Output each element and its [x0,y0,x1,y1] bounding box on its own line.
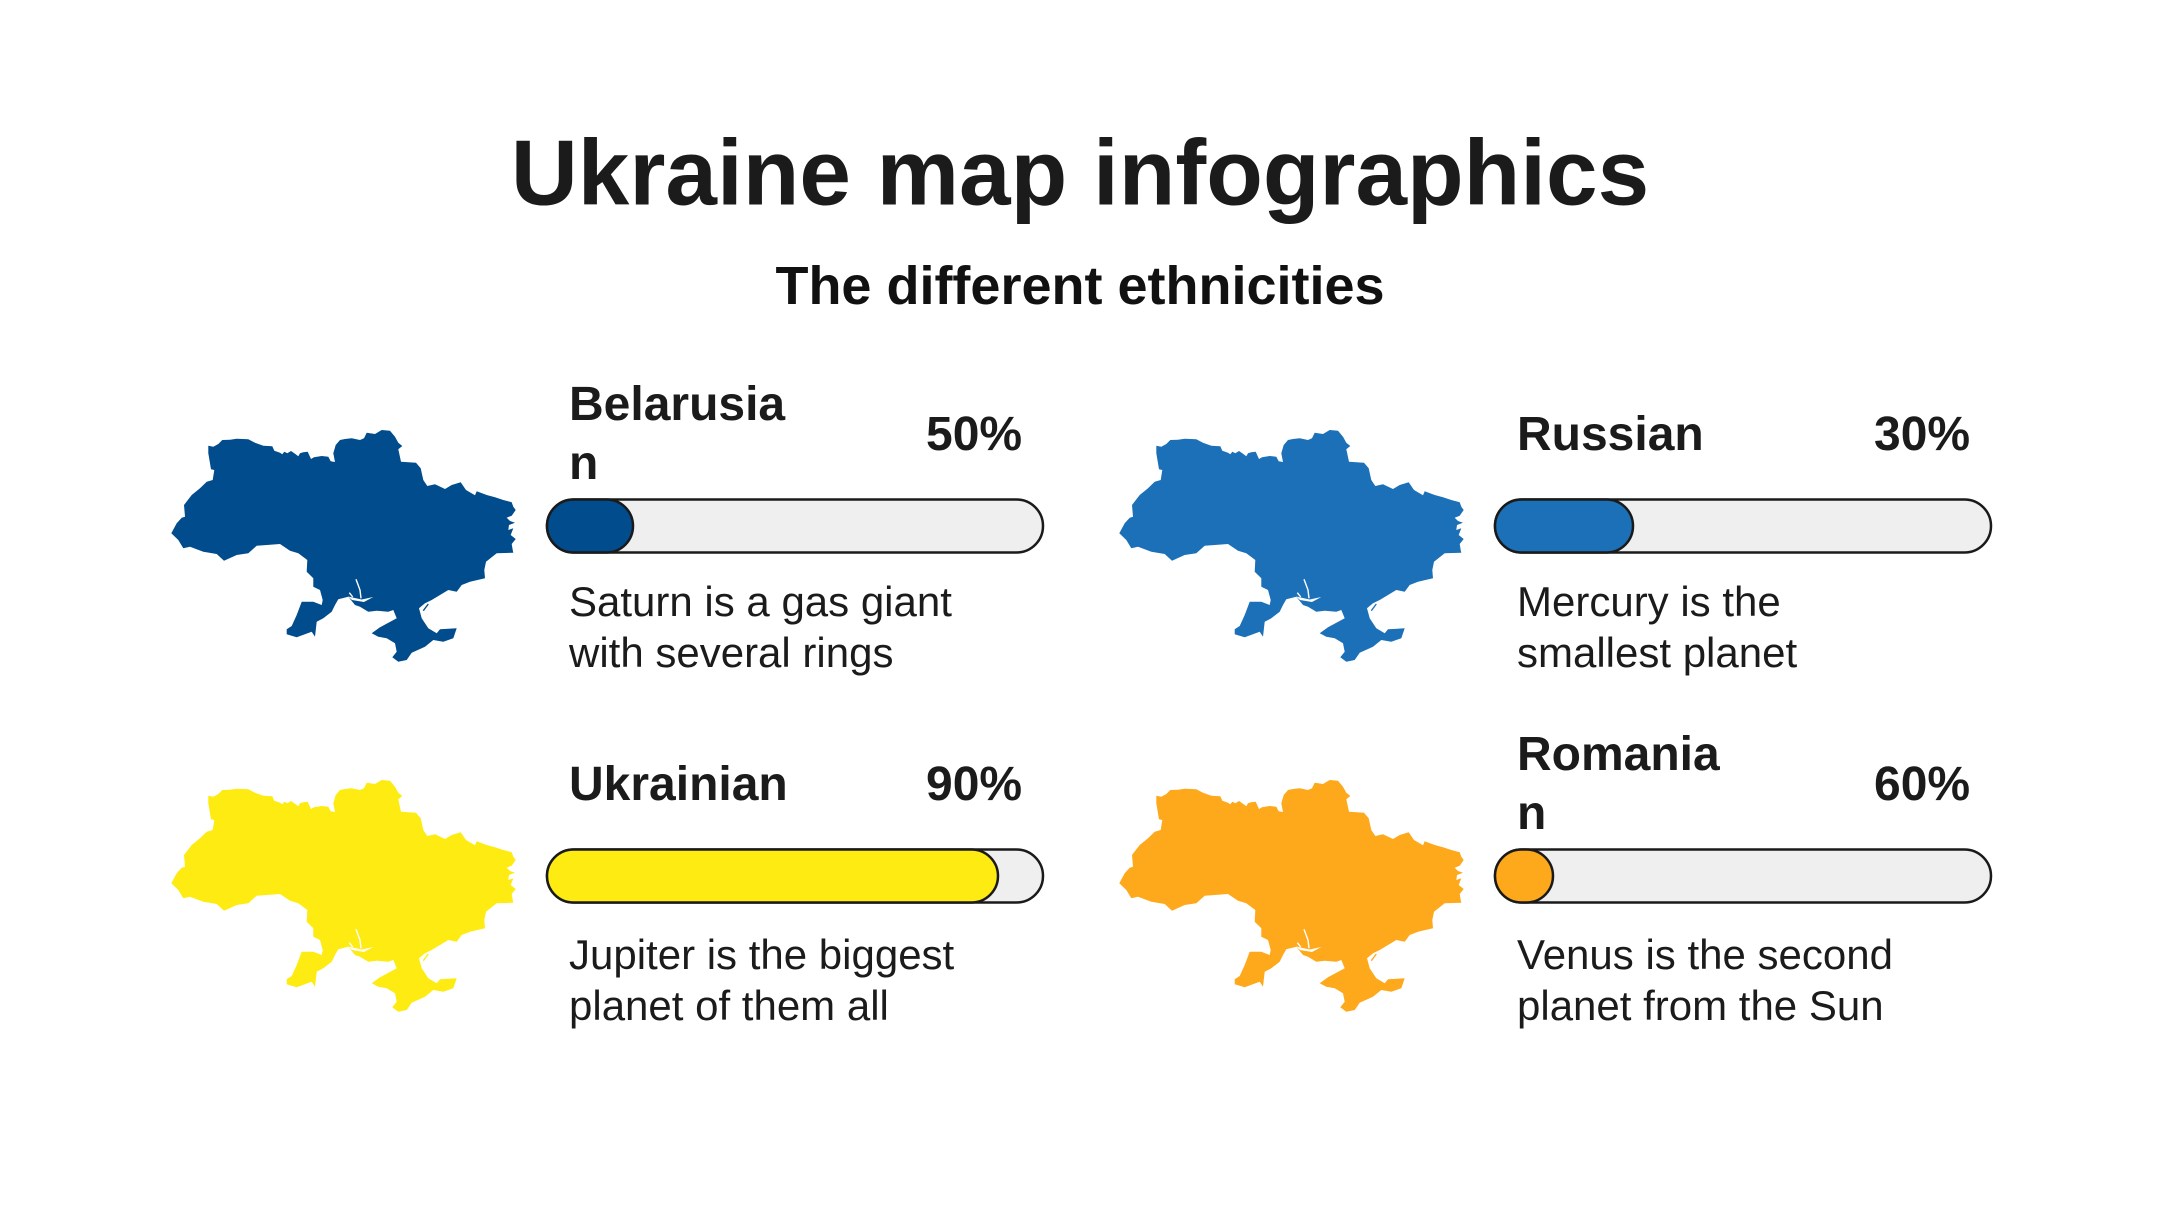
description: Mercury: smallest planet [1517,629,1797,676]
subtitle: The different ethnicities [775,256,1385,316]
panel: Ukrainian [171,758,1043,1029]
value: 90%: 90% [926,758,1022,811]
description: Saturn: Saturn is a gas giant [569,578,952,625]
icon: Ukraine map orange [1119,780,1464,1012]
label: Romanian: n [1517,787,1546,840]
description: Mercury: Mercury is the [1517,578,1781,625]
label: Belarusian: Belarusia [569,378,785,431]
label: Romanian: Romania [1517,728,1720,781]
label: Russian: Russian [1517,408,1704,461]
description: Saturn: with several rings [568,629,893,676]
label: Belarusian: n [569,437,598,490]
label: Ukrainian: Ukrainian [569,758,788,811]
icon: Ukraine map dark blue [171,430,516,662]
value: 60%: 60% [1874,758,1970,811]
description: Jupiter: Jupiter is the biggest [569,931,954,978]
panel: Belarusian [171,378,1043,676]
description: Venus: Venus is the second [1517,931,1893,978]
icon: Ukraine map blue [1119,430,1464,662]
icon: Ukraine map yellow [171,780,516,1012]
panel: Russian [1119,408,1991,676]
panel: Romanian [1119,728,1991,1029]
progress bar: Ukrainian [547,850,1043,902]
progress bar: Romanian [1495,850,1991,902]
description: Venus: planet from the Sun [1517,982,1884,1029]
value: 30%: 30% [1874,408,1970,461]
title: Ukraine map infographics [511,120,1649,224]
value: 50%: 50% [926,408,1022,461]
description: Jupiter: planet of them all [569,982,889,1029]
progress bar: Belarusian [547,500,1043,552]
progress bar: Russian [1495,500,1991,552]
